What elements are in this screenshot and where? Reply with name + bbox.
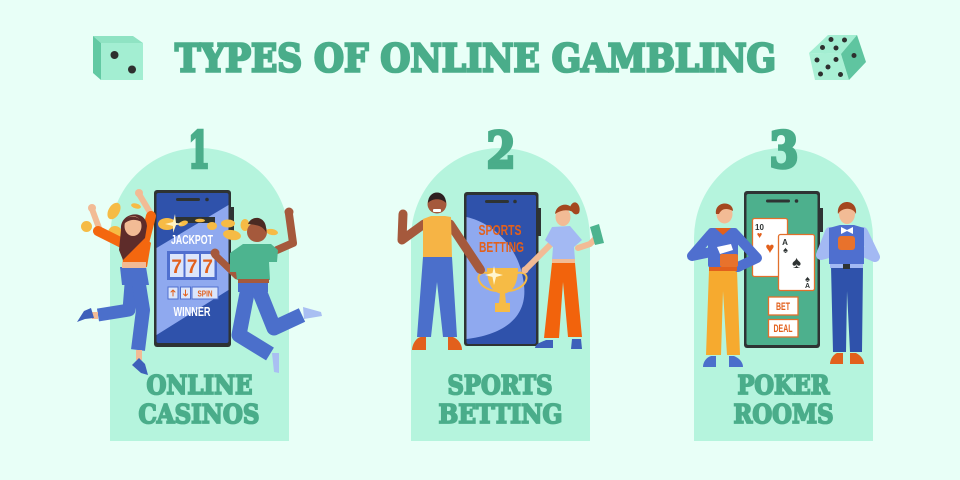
button: bet: BET (776, 301, 790, 313)
panel background arch (694, 148, 873, 441)
phone: jackpot slot machine: JACKPOT (171, 232, 213, 247)
panel background arch (110, 148, 289, 441)
button: deal (768, 320, 798, 337)
panel: poker rooms (692, 120, 875, 441)
person: dealer in blue vest and navy trousers (821, 202, 875, 364)
phone: jackpot slot machine: WINNER (174, 304, 211, 319)
number 1: 1 (188, 120, 210, 180)
label: poker rooms: ROOMS (734, 400, 834, 430)
phone: jackpot slot machine (154, 190, 234, 347)
button: deal: DEAL (774, 323, 793, 335)
icon: die showing two (93, 36, 143, 80)
gold coins (81, 200, 278, 241)
phone: sports betting trophy: BETTING (479, 239, 524, 256)
card: ace of spades: A (782, 238, 788, 247)
number 2: 2 (486, 120, 516, 180)
card: ten of hearts (752, 218, 788, 276)
label: poker rooms: POKER (738, 371, 830, 401)
card: ace of spades: ♠ (783, 245, 788, 255)
label: online casinos: CASINOS (138, 400, 260, 430)
card: ten of hearts: ♥ (766, 240, 775, 257)
card: ace of spades: ♠ (792, 253, 801, 272)
card: ten of hearts: 10 (755, 223, 764, 232)
phone: jackpot slot machine: 7 (171, 257, 182, 278)
icon: gold trophy (478, 266, 527, 312)
person: man in blue sweater and yellow trousers (692, 203, 757, 367)
title: TYPES OF ONLINE GAMBLING (175, 36, 776, 82)
label: sports betting: BETTING (438, 400, 562, 430)
button: bet (768, 297, 798, 315)
phone: jackpot slot machine: 7 (187, 257, 197, 278)
panel: online casinos (77, 120, 322, 441)
card: ace of spades (778, 234, 814, 290)
label: online casinos (138, 371, 260, 430)
panel: sports betting (402, 120, 604, 441)
card: ace of spades: ♠ (805, 274, 810, 284)
number 3: 3 (770, 120, 798, 180)
panel background arch (411, 148, 590, 441)
phone: jackpot slot machine: SPIN (198, 290, 213, 298)
label: sports betting: SPORTS (448, 371, 552, 401)
phone: poker cards (744, 191, 823, 348)
icon: die showing many pips (809, 35, 866, 80)
person: jumping woman in orange top (77, 189, 151, 375)
person: man in yellow tank top (402, 192, 485, 350)
label: poker rooms (734, 371, 834, 430)
person: jumping man in green shirt (210, 208, 322, 373)
card: ten of hearts: ♥ (757, 230, 762, 240)
card: ace of spades: A (805, 283, 810, 290)
label: sports betting (438, 371, 562, 430)
phone: sports betting trophy (464, 192, 541, 346)
label: online casinos: ONLINE (146, 371, 252, 401)
person: woman in blue shirt with cash (522, 202, 604, 349)
phone: sports betting trophy: SPORTS (478, 222, 522, 239)
phone: jackpot slot machine: 7 (202, 257, 213, 278)
